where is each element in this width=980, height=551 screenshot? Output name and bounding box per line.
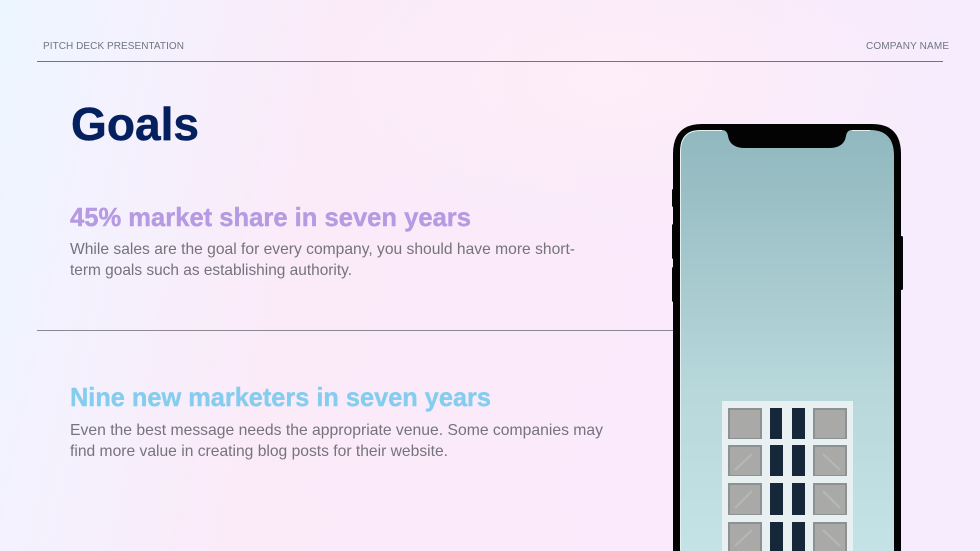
phone body [673,124,901,551]
phone mockup [672,124,903,551]
goal one description [70,241,575,279]
phone screen [680,130,894,551]
phone side buttons [672,189,903,302]
header: company name: COMPANY NAME [866,41,949,52]
goal one [70,202,575,279]
goal two heading: Nine new marketers in seven years [70,382,491,412]
title: Goals [71,98,199,150]
goal one heading: 45% market share in seven years [70,202,471,232]
goal two description [70,422,603,460]
goal two description: find more value in creating blog posts for their website. [70,443,448,460]
building photo [722,401,853,551]
header: deck label: PITCH DECK PRESENTATION [43,41,184,52]
goal two [70,382,603,460]
goal two description: Even the best message needs the appropriate venue. Some companies may [70,422,603,439]
goal one description: While sales are the goal for every company, you should have more short- [70,241,575,258]
goal one description: term goals such as establishing authority. [70,262,352,279]
